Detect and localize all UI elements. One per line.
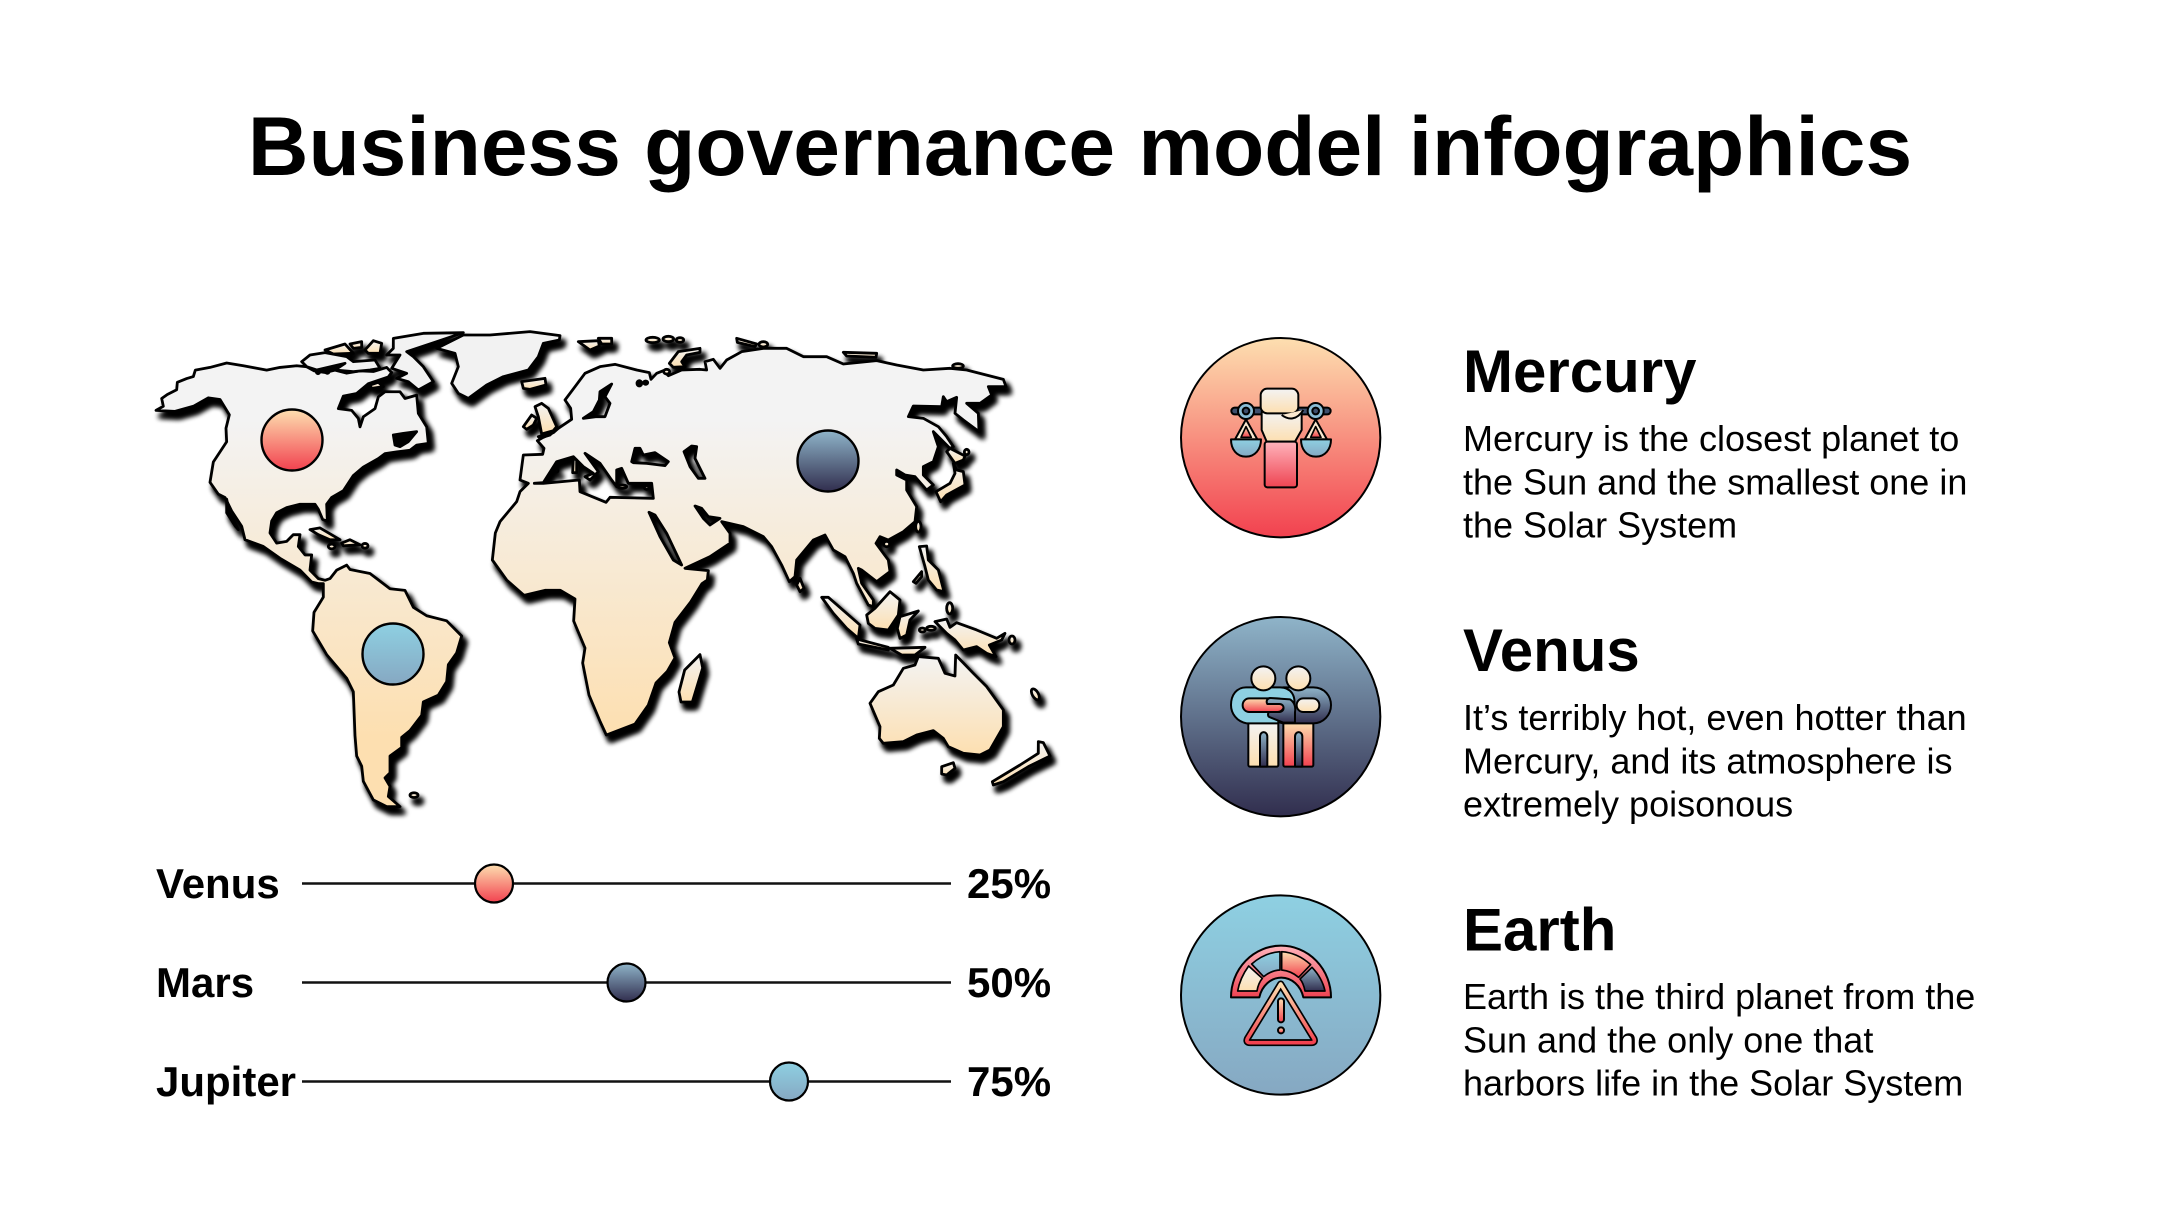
slider row: Mars: 50% [967, 959, 1051, 1006]
slider row: Mars [156, 959, 1051, 1006]
continent: North and South America [156, 363, 462, 807]
world map [156, 332, 1050, 807]
Gulf of St Lawrence and dots [316, 370, 417, 447]
Gulf of California [227, 499, 238, 530]
text block: Venus: It’s terribly hot, even hotter than [1463, 697, 1967, 738]
slider row: Venus: 25% [967, 860, 1051, 907]
slider row: Venus: Venus [156, 860, 280, 907]
slider row: Mars: Mars [156, 959, 254, 1006]
Caribbean islands [310, 528, 418, 798]
map: Greenland and Arctic Canada [302, 332, 560, 447]
icon: risk gauge with warning triangle [1181, 895, 1380, 1095]
Greenland and Baffin [302, 332, 560, 398]
map: Americas [156, 363, 462, 807]
Arctic islands and Iceland [325, 341, 546, 389]
text block: Earth: Earth is the third planet from the [1463, 976, 1975, 1017]
slider row: Jupiter: 75% [967, 1058, 1051, 1105]
text block: Earth: Sun and the only one that [1463, 1019, 1873, 1060]
text block: Earth: Earth [1463, 896, 1616, 964]
map marker: South America [362, 624, 424, 684]
icon: hand holding scales [1181, 338, 1380, 537]
text block: Mercury: the Sun and the smallest one in [1463, 461, 1967, 502]
continent: Afro-Eurasia [492, 348, 1006, 735]
Australia [870, 655, 1003, 755]
text block: Venus: Mercury, and its atmosphere is [1463, 740, 1953, 781]
slider row: Venus [156, 860, 1051, 907]
text block: Mercury: Mercury is the closest planet to [1463, 418, 1959, 459]
map marker: North America [262, 410, 322, 470]
icon: two people embracing [1181, 617, 1380, 816]
text block: Mercury [1463, 338, 1967, 546]
text block: Mercury: Mercury [1463, 338, 1697, 405]
text block: Venus: Venus [1463, 617, 1640, 684]
text block: Venus: extremely poisonous [1463, 784, 1793, 825]
map: Europe, Asia, Africa, Oceania [492, 336, 1050, 785]
English Channel and White Sea dots [538, 381, 648, 438]
map marker: Asia [798, 430, 858, 492]
text block: Earth: harbors life in the Solar System [1463, 1063, 1963, 1104]
text block: Mercury: the Solar System [1463, 505, 1737, 546]
slider row: Jupiter [156, 1058, 1051, 1105]
text block: Venus [1463, 617, 1967, 825]
text block: Earth [1463, 896, 1975, 1104]
Eurasian, Asian and Pacific islands [523, 336, 1050, 785]
slider row: Jupiter: Jupiter [156, 1058, 296, 1105]
title: Business governance model infographics [248, 99, 1912, 193]
